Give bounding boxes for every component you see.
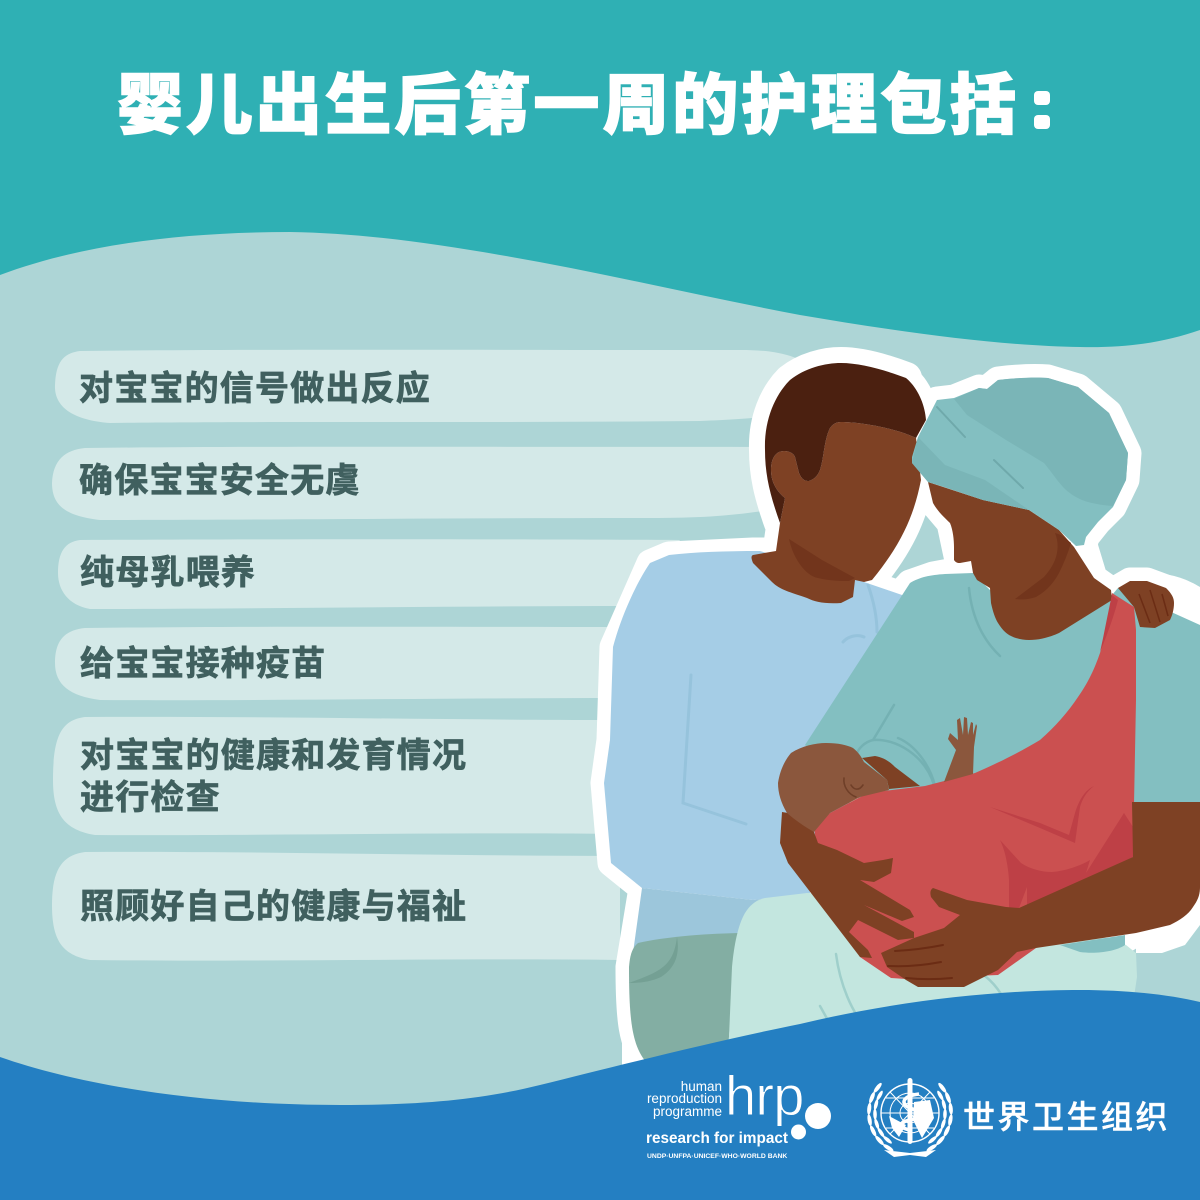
mother: neck shadow	[1015, 533, 1071, 599]
mother: shirt	[805, 573, 1200, 860]
man: hair	[765, 363, 926, 523]
baby: body	[862, 756, 920, 789]
list item: exclusive breastfeeding: 纯母乳喂养	[80, 554, 256, 592]
list item: respond to signals: 对宝宝的信号做出反应	[79, 370, 431, 408]
mother: holding arm and hand	[881, 802, 1200, 987]
man: trouser fold	[629, 937, 678, 983]
list item: keep baby safe: 确保宝宝安全无虞	[79, 462, 361, 500]
title colon	[1034, 91, 1050, 129]
HRP partners: UNDP·UNFPA·UNICEF·WHO·WORLD BANK	[647, 1153, 787, 1160]
list item: keep baby safe	[52, 447, 770, 520]
continents	[889, 1100, 934, 1138]
laurel: left	[867, 1082, 894, 1153]
mother: finger lines	[888, 945, 952, 979]
man: neck and face	[752, 422, 921, 603]
HRP descriptor text: programme	[653, 1104, 722, 1119]
mother: shirt under arm	[1060, 935, 1125, 953]
list item: health and development checks: 进行检查	[80, 779, 221, 817]
list item: health and development checks: 对宝宝的健康和发育情况	[80, 737, 467, 775]
mother: headscarf fold	[912, 437, 1029, 510]
HRP descriptor text	[647, 1079, 722, 1119]
man: shirt	[604, 551, 930, 900]
mother: headscarf crown	[954, 378, 1128, 506]
list item: respond to signals	[55, 350, 810, 423]
mother: headscarf creases	[937, 407, 1023, 488]
mother: headscarf	[912, 378, 1128, 546]
mother: face and neck	[928, 482, 1112, 640]
man: trousers	[629, 933, 738, 1062]
mother: trouser folds	[820, 954, 1001, 1028]
list item: vaccination: 给宝宝接种疫苗	[80, 645, 326, 683]
mother: sling	[814, 593, 1136, 979]
logo: WHO emblem	[867, 1078, 953, 1157]
bottom blue wave banner	[0, 990, 1200, 1200]
baby: head	[778, 743, 889, 832]
mother: shirt creases	[856, 588, 1000, 786]
logo: WHO name: 世界卫生组织	[963, 1099, 1170, 1135]
man: lower shirt	[632, 888, 810, 960]
HRP dots	[791, 1103, 831, 1140]
HRP descriptor text: human	[681, 1079, 722, 1094]
mother: hand on shoulder	[1118, 581, 1174, 628]
top teal wave banner	[0, 0, 1200, 347]
hand: knuckle lines	[1139, 590, 1168, 623]
list item: exclusive breastfeeding	[58, 539, 680, 609]
logo: HRP	[646, 1064, 831, 1160]
baby: closed eye	[844, 778, 863, 797]
sling: dark folds	[990, 595, 1133, 908]
HRP descriptor text: reproduction	[647, 1091, 722, 1106]
mother: trousers	[728, 893, 1137, 1060]
list item: health and development checks	[53, 717, 610, 835]
laurel: right	[926, 1082, 953, 1153]
man: chin shadow	[789, 539, 855, 581]
HRP tagline: research for impact	[646, 1130, 788, 1147]
list item: vaccination	[55, 627, 620, 700]
laurel ribbon	[884, 1150, 936, 1157]
globe	[881, 1084, 939, 1142]
HRP wordmark: hrp	[725, 1064, 804, 1127]
list item: self care	[52, 852, 620, 961]
man: shirt creases	[683, 585, 877, 824]
illustration: parents with baby	[604, 363, 1200, 1080]
list item: self care: 照顾好自己的健康与福祉	[80, 888, 467, 926]
staff	[908, 1078, 912, 1144]
baby: raised arm and hand	[944, 717, 977, 782]
title: 婴儿出生后第一周的护理包括	[117, 68, 1019, 142]
mother: supporting arm and hand	[780, 812, 914, 958]
serpent	[902, 1094, 919, 1130]
white sticker outline	[604, 363, 1200, 1080]
